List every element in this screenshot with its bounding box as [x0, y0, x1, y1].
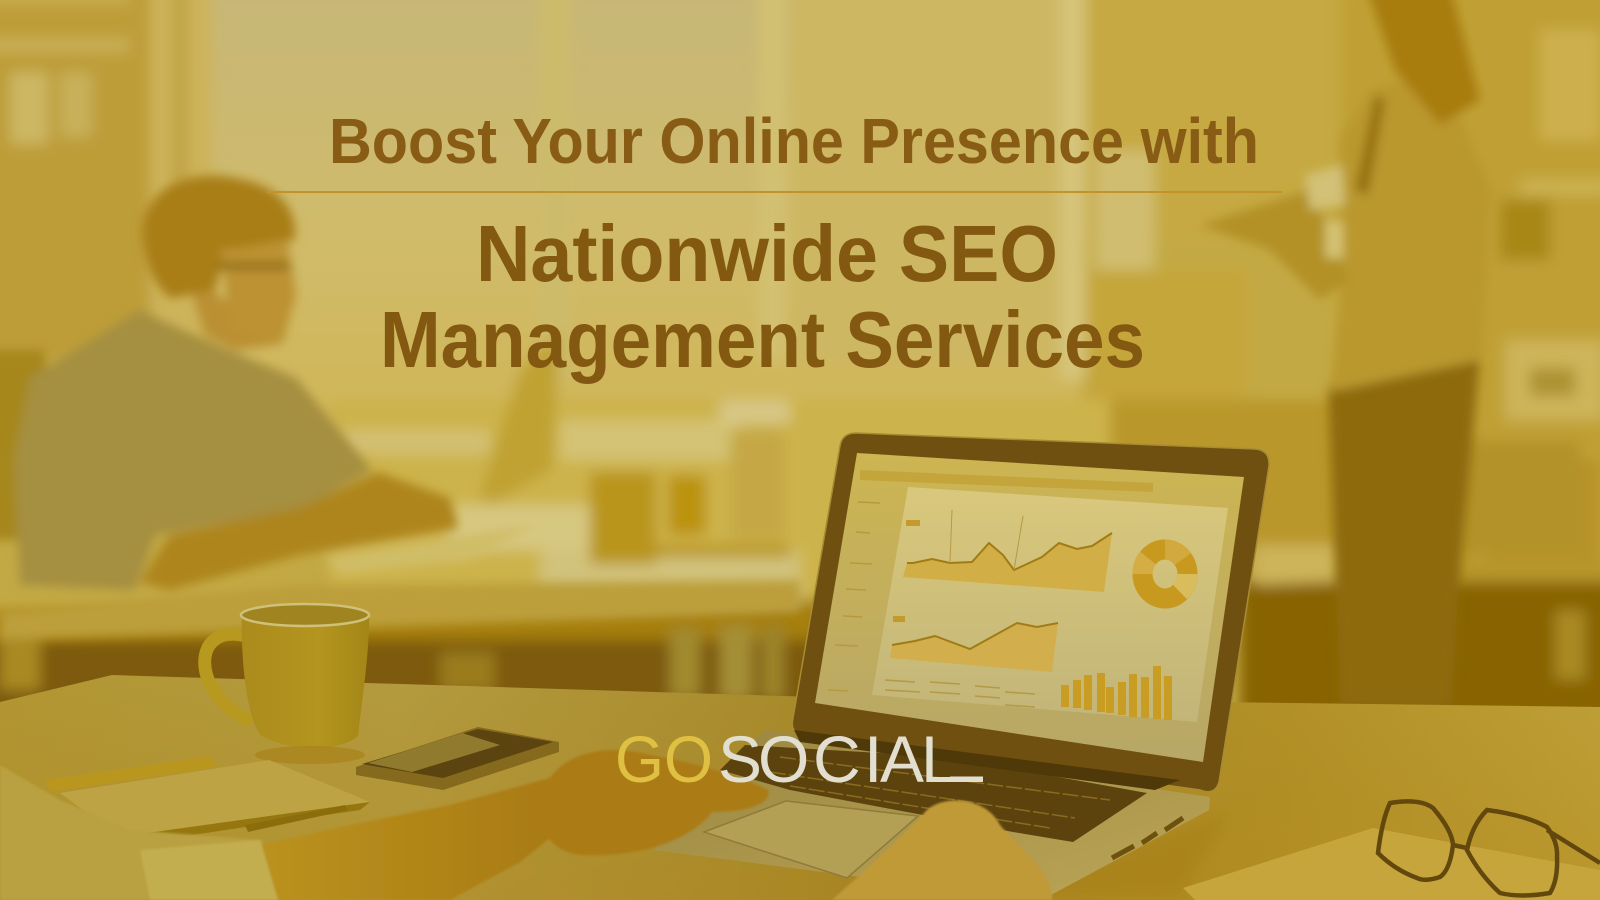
logo — [615, 722, 983, 796]
front desk — [0, 675, 1600, 900]
keyboard — [720, 745, 1147, 842]
heading: Nationwide SEO: Nationwide SEO — [476, 209, 1058, 298]
trackpad — [704, 801, 918, 878]
sleeve and forearm — [0, 765, 560, 900]
bar chart — [1065, 666, 1168, 720]
man working — [0, 176, 800, 640]
coffee mug — [205, 604, 369, 764]
background: blurred office scene — [0, 0, 1600, 720]
right hand — [832, 801, 1052, 900]
glasses frame — [1378, 801, 1600, 896]
reading glasses on paper — [1183, 801, 1600, 900]
far table underside and shelving — [0, 600, 1220, 720]
table summary rows — [885, 680, 1035, 707]
title block — [267, 105, 1282, 384]
middle scene: far desk surface — [330, 330, 1110, 620]
app panel — [872, 487, 1228, 722]
smartphone — [356, 727, 559, 790]
left hand on trackpad — [540, 750, 768, 855]
hinge shadow — [794, 730, 1180, 790]
line chart two — [890, 616, 1058, 672]
side ports — [1112, 818, 1183, 858]
window — [212, 0, 1082, 440]
divider rule — [267, 191, 1282, 193]
screen — [815, 453, 1244, 762]
right shelves — [1340, 0, 1600, 700]
left bookcase — [0, 0, 212, 360]
paper sheet — [1183, 828, 1600, 900]
sidebar — [828, 502, 880, 691]
notebook and pencils — [45, 756, 370, 845]
heading: intro line: Boost Your Online Presence with — [329, 105, 1259, 177]
logo: SOCIAL: SOCIAL — [718, 722, 958, 796]
heading: Management Services: Management Services — [380, 295, 1145, 384]
line chart one — [903, 510, 1112, 592]
woman standing — [1200, 0, 1492, 705]
right side under table — [1240, 440, 1600, 720]
donut chart — [1142, 549, 1188, 598]
laptop — [653, 433, 1269, 900]
toolbar — [860, 470, 1153, 492]
logo: GO: GO — [615, 722, 713, 796]
laptop deck — [653, 730, 1210, 895]
screen lid — [792, 433, 1269, 792]
